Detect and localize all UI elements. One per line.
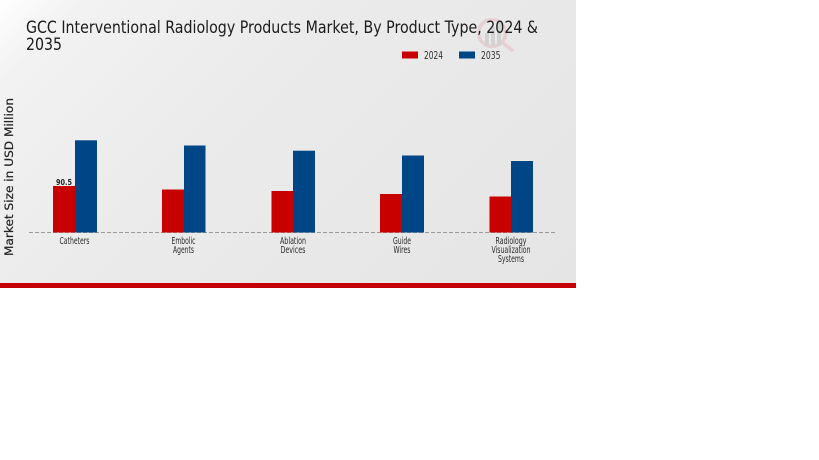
category labels: Ablation: [280, 236, 306, 247]
category labels: Radiology: [496, 236, 527, 247]
category labels: Devices: [280, 245, 306, 256]
category labels: Catheters: [60, 236, 90, 247]
y axis label: Market Size in USD Million: [2, 98, 16, 256]
baseline: [29, 232, 557, 234]
value label: 90.5: [56, 178, 72, 187]
bar group: Ablation Devices: [272, 151, 315, 232]
panel: chart background: [0, 0, 576, 283]
legend: 2024: [424, 50, 443, 62]
category labels: Agents: [173, 245, 194, 256]
category labels: Systems: [498, 254, 524, 265]
legend: [402, 50, 500, 62]
title: 2035: [26, 35, 62, 55]
bar group: Catheters: [53, 140, 97, 232]
title: [26, 18, 538, 55]
category labels: Embolic: [172, 236, 196, 247]
bottom red band: [0, 283, 576, 288]
icon: watermark logo: [478, 20, 513, 51]
bar group: Embolic Agents: [162, 146, 206, 232]
legend: 2035: [481, 50, 500, 62]
category labels: Guide: [393, 236, 411, 247]
bar group: Guide Wires: [380, 156, 424, 232]
category labels: [60, 236, 530, 265]
category labels: Wires: [394, 245, 411, 256]
title: GCC Interventional Radiology Products Market, By Product Type, 2024 &: [26, 18, 538, 38]
category labels: Visualization: [492, 245, 530, 256]
bar group: Radiology Visualization Systems: [490, 161, 533, 232]
